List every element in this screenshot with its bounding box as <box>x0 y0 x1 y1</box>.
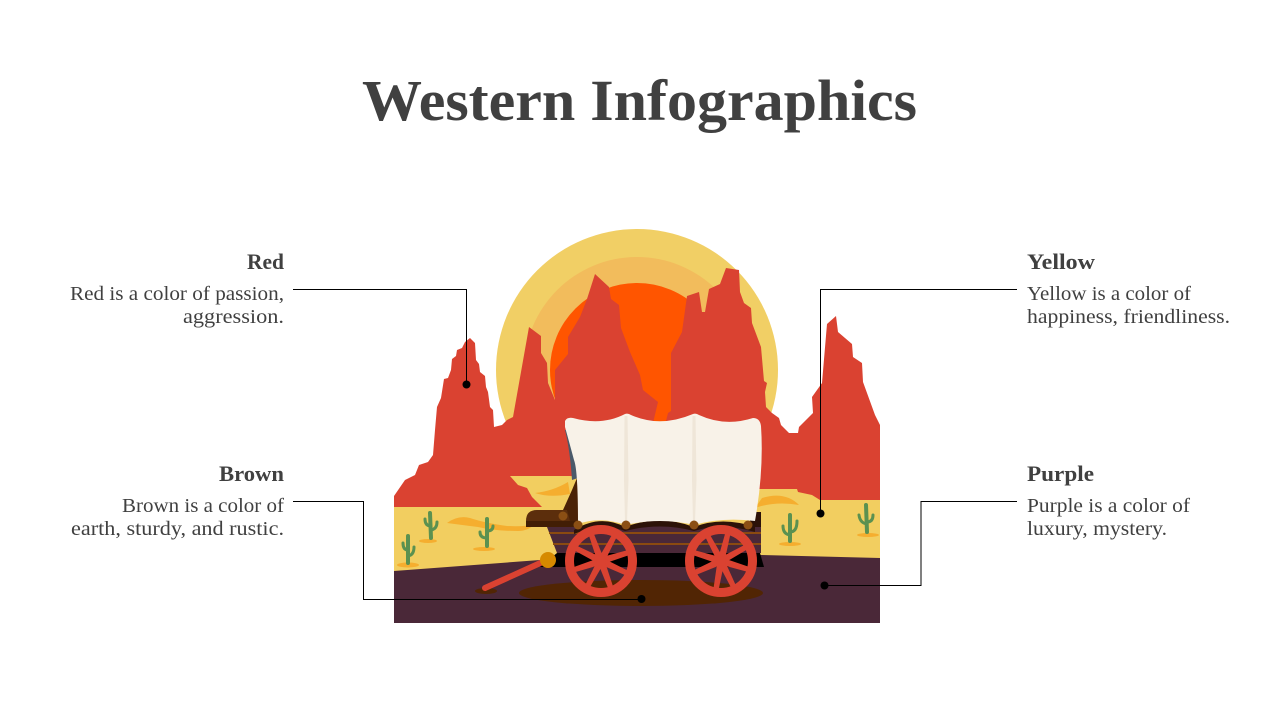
red heading: Red <box>247 249 284 274</box>
title: Western Infographics <box>362 68 917 133</box>
purple description: luxury, mystery. <box>1027 518 1167 540</box>
canopy <box>565 414 762 525</box>
yellow leader line <box>816 290 1017 518</box>
red description <box>70 283 284 328</box>
wagon body <box>547 525 761 553</box>
sand dunes <box>447 482 799 531</box>
purple description: Purple is a color of <box>1027 495 1190 517</box>
wagon pole <box>485 560 547 588</box>
illustration: western desert scene <box>394 229 880 623</box>
callout: brown <box>71 461 646 603</box>
red description: aggression. <box>183 306 284 328</box>
yellow desert ground <box>394 476 880 576</box>
left wheel <box>569 530 633 592</box>
cactus 2 <box>419 513 437 543</box>
red leader line <box>293 290 470 388</box>
red mesas <box>394 268 880 510</box>
brown leader line <box>293 502 646 603</box>
callout: purple <box>820 461 1190 590</box>
yellow heading: Yellow <box>1027 249 1095 274</box>
brown description: earth, sturdy, and rustic. <box>71 518 284 540</box>
covered wagon <box>485 414 764 593</box>
cactus 3 <box>473 519 495 551</box>
yellow description: Yellow is a color of <box>1027 283 1191 305</box>
yellow description <box>1027 283 1230 328</box>
red description: Red is a color of passion, <box>70 283 284 305</box>
purple leader line <box>820 502 1017 590</box>
sun <box>496 229 778 511</box>
wagon knobs <box>558 512 752 530</box>
yellow description: happiness, friendliness. <box>1027 306 1230 328</box>
callout: yellow <box>816 249 1230 518</box>
wagon ground shadow <box>519 580 763 606</box>
rear upright <box>750 512 761 527</box>
body stripes <box>549 533 761 544</box>
cactus 1 <box>397 536 419 568</box>
pole joint <box>540 552 556 568</box>
right wheel <box>689 529 753 593</box>
black chassis <box>540 553 764 567</box>
cactus 4 <box>779 515 801 546</box>
canopy shadow edge <box>565 430 578 480</box>
brown description <box>71 495 284 540</box>
driver seat <box>526 478 580 527</box>
brown description: Brown is a color of <box>122 495 284 517</box>
pole shadow <box>475 588 497 594</box>
callout: red <box>70 249 470 388</box>
brown heading: Brown <box>219 461 284 486</box>
purple description <box>1027 495 1190 540</box>
dark arch <box>574 520 755 534</box>
purple road <box>394 555 880 623</box>
purple heading: Purple <box>1027 461 1094 486</box>
cactus group <box>397 505 879 568</box>
canopy folds <box>624 416 696 522</box>
cactus 5 <box>857 505 879 537</box>
